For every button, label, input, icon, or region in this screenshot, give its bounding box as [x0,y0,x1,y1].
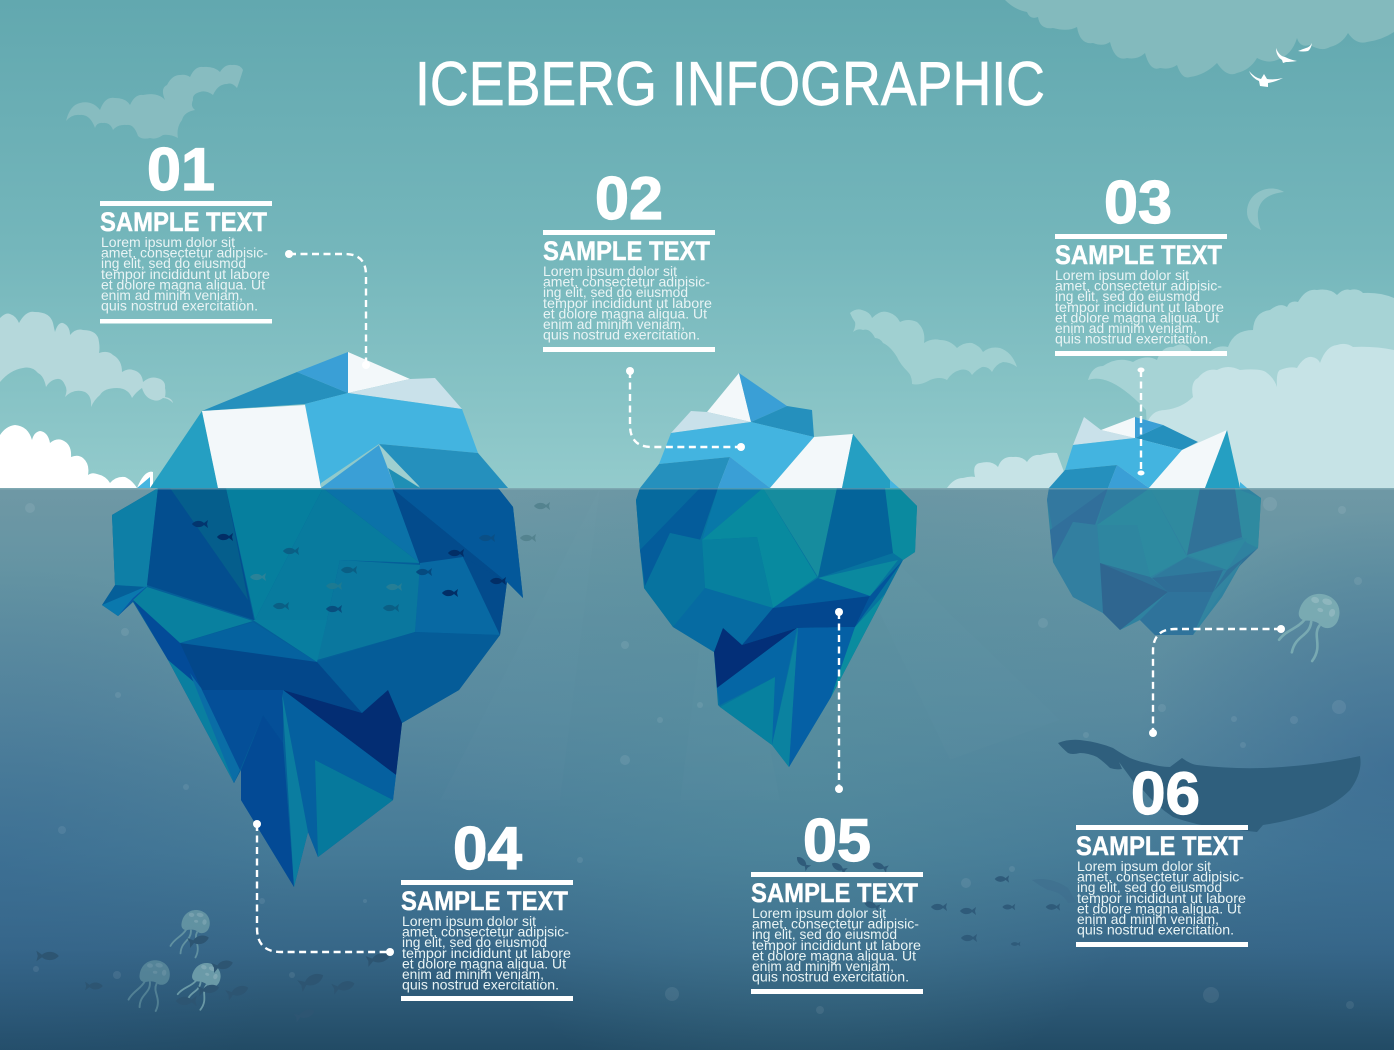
cloud: left [0,312,173,407]
body 05: quis nostrud exercitation. [752,968,909,984]
connector 6 [1149,625,1285,737]
body 03: quis nostrud exercitation. [1055,330,1212,346]
heading 06: SAMPLE TEXT [1076,831,1243,861]
text block 05 [751,807,923,994]
heading 03: SAMPLE TEXT [1055,240,1222,270]
connector 5 [835,608,843,793]
body 04: tempor incididunt ut labore [402,945,571,961]
number 03: 03 [1104,169,1172,236]
body 03: et dolore magna aliqua. Ut [1055,310,1219,326]
iceberg 1 [102,352,550,887]
body 06: Lorem ipsum dolor sit [1077,858,1211,874]
body 02: amet, consectetur adipisic- [543,274,710,290]
text block 06 [1076,760,1248,947]
number 02: 02 [595,165,663,232]
body 02: enim ad minim veniam, [543,316,685,332]
jellyfish lower left 3 [175,957,224,1013]
iceberg 2 below water [636,488,917,767]
bubbles [25,497,1362,1014]
body 03 [1055,267,1224,346]
jellyfish lower left 1 [169,907,212,959]
body 01: Lorem ipsum dolor sit [101,234,235,250]
connector 4 [253,820,394,956]
body 02: Lorem ipsum dolor sit [543,263,677,279]
fish on iceberg 1 [192,502,550,613]
body 02: tempor incididunt ut labore [543,295,712,311]
moon [1247,189,1284,230]
connector 1 [285,250,370,369]
number 04: 04 [453,815,523,882]
body 06: tempor incididunt ut labore [1077,890,1246,906]
birds [1249,43,1312,87]
body 01: amet, consectetur adipisic- [101,244,268,260]
cloud: right back layer [1088,289,1394,488]
text block 01 [100,136,272,324]
cloud: left white [0,425,153,488]
body 06: quis nostrud exercitation. [1077,922,1234,938]
body 06: amet, consectetur adipisic- [1077,868,1244,884]
body 01: tempor incididunt ut labore [101,266,270,282]
iceberg 1 below water [102,488,523,887]
body 04: amet, consectetur adipisic- [402,924,569,940]
heading 05: SAMPLE TEXT [751,878,918,908]
body 03: enim ad minim veniam, [1055,320,1197,336]
body 01 [101,234,270,314]
body 03: amet, consectetur adipisic- [1055,278,1222,294]
sky background [0,0,1394,489]
school of fish lower centre [794,854,1060,946]
body 05: amet, consectetur adipisic- [752,916,919,932]
number 05: 05 [803,807,871,874]
cloud: low right [947,453,1070,488]
body 02: ing elit, sed do eiusmod [543,284,688,300]
whale [1058,740,1361,832]
body 01: enim ad minim veniam, [101,287,243,303]
body 05 [752,905,921,984]
body 05: et dolore magna aliqua. Ut [752,948,916,964]
heading 01: SAMPLE TEXT [100,207,267,237]
body 01: et dolore magna aliqua. Ut [101,276,265,292]
text block 04 [401,815,573,1001]
body 02: quis nostrud exercitation. [543,326,700,342]
body 04: ing elit, sed do eiusmod [402,934,547,950]
body 02 [543,263,712,342]
number 06: 06 [1131,760,1200,827]
iceberg 3 above water [1049,417,1247,488]
jellyfish lower left 2 [127,957,172,1012]
water surface line [0,488,1394,490]
body 04: et dolore magna aliqua. Ut [402,956,566,972]
cloud: top right [1005,0,1394,78]
body 01: ing elit, sed do eiusmod [101,255,246,271]
cloud: centre [850,309,1017,384]
number 01: 01 [147,136,215,203]
school of fish lower left [36,933,392,1023]
text block 02 [543,165,715,352]
iceberg 1 above water [137,352,508,488]
iceberg 2 above water [640,373,899,488]
body 06: ing elit, sed do eiusmod [1077,879,1222,895]
body 03: Lorem ipsum dolor sit [1055,267,1189,283]
title: ICEBERG INFOGRAPHIC [415,50,1045,119]
heading 02: SAMPLE TEXT [543,236,710,266]
heading 04: SAMPLE TEXT [401,886,568,916]
body 02: et dolore magna aliqua. Ut [543,306,707,322]
connector 3 [1138,368,1144,476]
body 03: tempor incididunt ut labore [1055,299,1224,315]
jellyfish right [1276,585,1344,665]
body 06: et dolore magna aliqua. Ut [1077,900,1241,916]
iceberg 3 [1047,417,1261,635]
cloud: top left [66,65,243,139]
body 06 [1077,858,1246,938]
body 04: Lorem ipsum dolor sit [402,913,536,929]
body 05: tempor incididunt ut labore [752,937,921,953]
iceberg 3 below water [1047,488,1261,635]
sea background [0,488,1394,1050]
body 04: quis nostrud exercitation. [402,976,559,992]
body 01: quis nostrud exercitation. [101,298,258,314]
body 04: enim ad minim veniam, [402,966,544,982]
iceberg 2 [636,373,917,767]
faint distant whale [1032,879,1076,903]
connector 2 [626,367,745,451]
body 06: enim ad minim veniam, [1077,911,1219,927]
body 05: enim ad minim veniam, [752,958,894,974]
body 05: Lorem ipsum dolor sit [752,905,886,921]
body 03: ing elit, sed do eiusmod [1055,288,1200,304]
cloud: right front layer [1120,344,1394,488]
body 05: ing elit, sed do eiusmod [752,926,897,942]
body 04 [402,913,571,992]
text block 03 [1055,169,1227,356]
